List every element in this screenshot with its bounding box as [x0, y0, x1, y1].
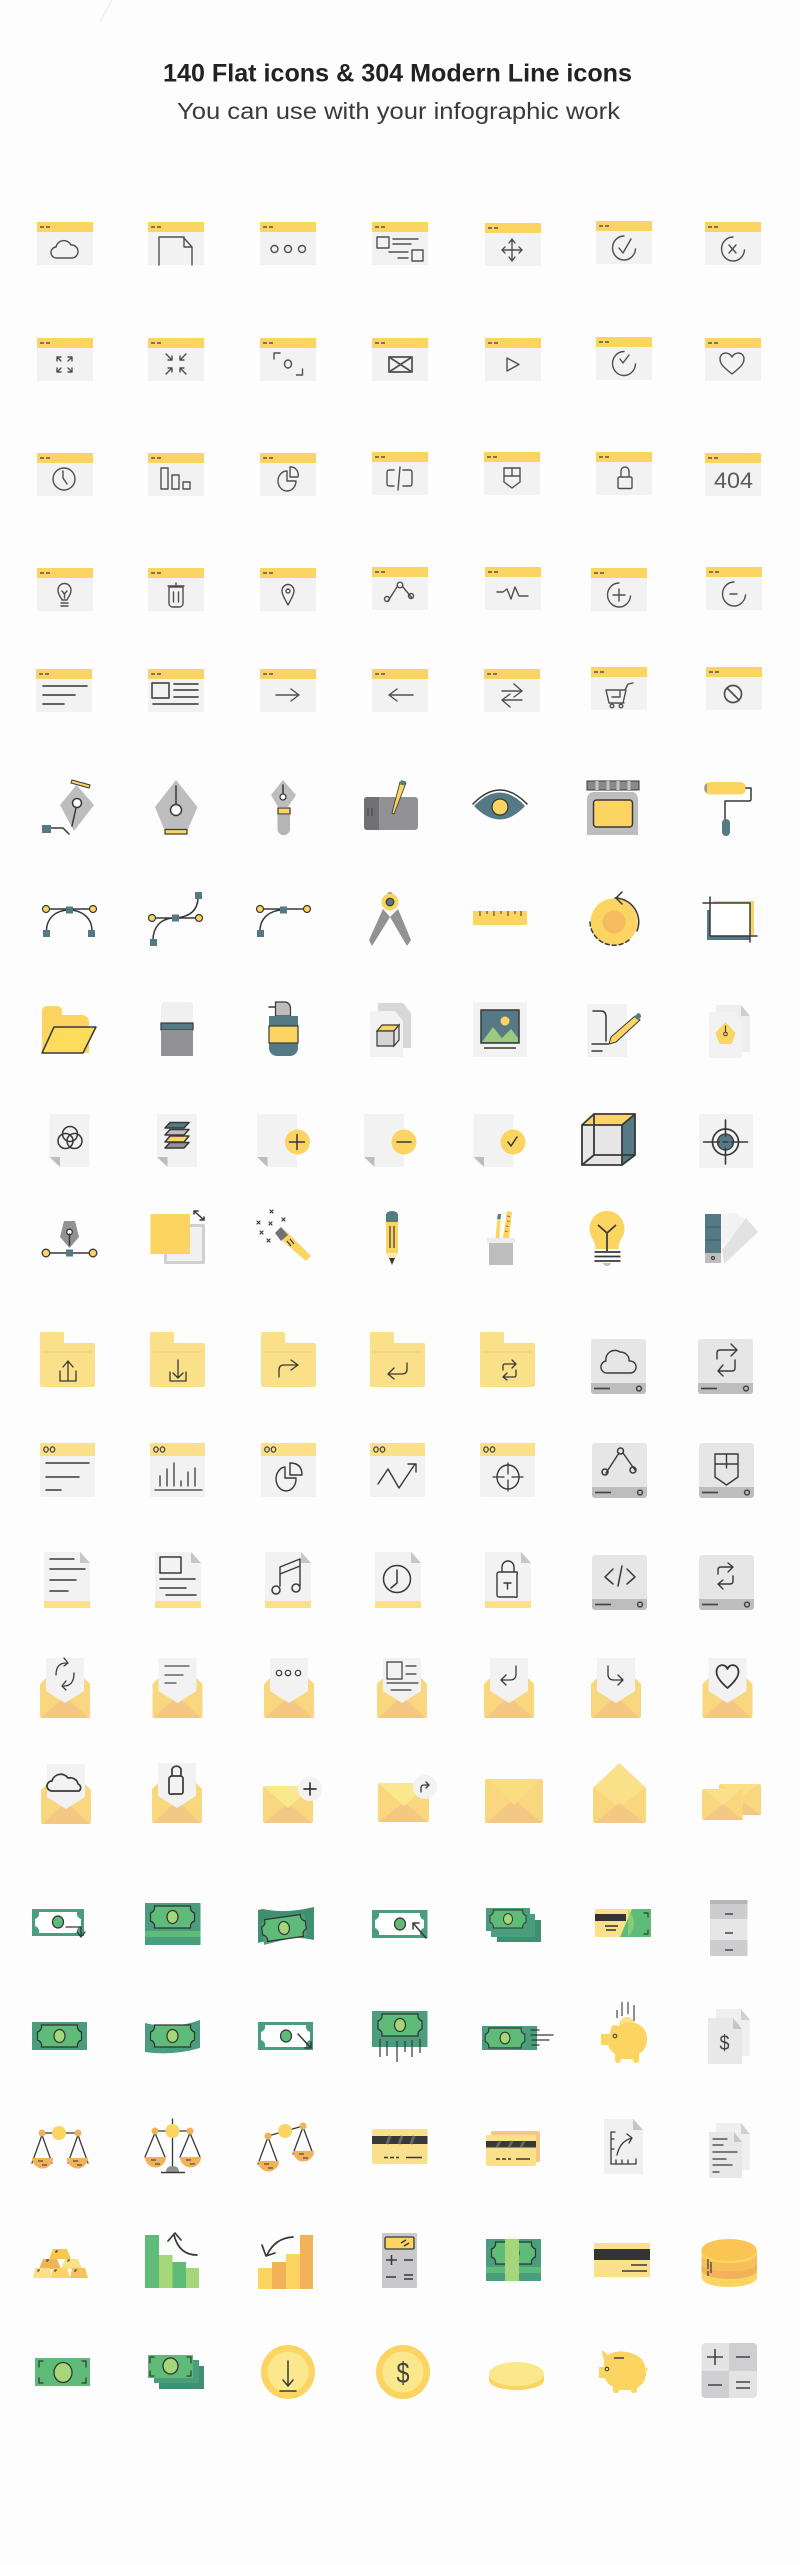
icon: cash bundle	[145, 1903, 200, 1945]
icon: document venn	[50, 1114, 90, 1167]
icon: file music	[265, 1552, 311, 1608]
icon: envelope dots	[264, 1658, 314, 1718]
icon: piggy bank	[599, 2350, 648, 2393]
icon: window code	[372, 452, 428, 495]
icon: target	[699, 1114, 753, 1168]
icon: window cart	[591, 667, 647, 710]
icon: picture	[473, 1002, 527, 1057]
icon: colour swatches	[705, 1213, 758, 1264]
icon: envelope article	[377, 1658, 427, 1718]
icon: dollar documents	[708, 2009, 750, 2064]
icon: card back	[594, 2243, 650, 2277]
icon: envelope add	[263, 1777, 322, 1823]
icon: window cancel	[705, 222, 761, 265]
icon: envelope reply	[484, 1658, 534, 1718]
icon: magic wand	[257, 1210, 311, 1261]
icon: drive cloud	[591, 1339, 646, 1394]
icon: coin stack	[702, 2239, 757, 2287]
icon: window check	[596, 221, 652, 264]
icon: document layers	[157, 1114, 197, 1167]
icon: document chart	[604, 2119, 643, 2174]
icon: window play	[485, 338, 541, 381]
icon: eraser	[161, 1002, 193, 1056]
icon: envelope heart	[702, 1658, 752, 1718]
icon: bezier curve 1	[42, 906, 96, 937]
icon: window pin	[260, 568, 316, 611]
icon: envelope cloud	[41, 1764, 91, 1824]
icon: documents with text	[709, 2123, 750, 2178]
icon: compass	[369, 892, 411, 946]
icon: window arrow right	[260, 669, 316, 712]
icon: window focus	[260, 338, 316, 381]
icon: bezier curve 3	[256, 906, 310, 937]
icon: wavy banknote	[145, 2020, 200, 2053]
icon: window trash	[148, 568, 204, 611]
icon: folder forward	[261, 1332, 316, 1387]
icon: window dots	[260, 222, 316, 265]
icon: credit card	[372, 2129, 428, 2164]
icon: crop	[703, 897, 757, 942]
icon: window 404: 404	[714, 468, 753, 493]
icon: window download circle	[596, 337, 652, 380]
icon: ruler	[473, 911, 527, 925]
icon: eye	[473, 790, 527, 820]
icon: pen holder	[487, 1211, 515, 1265]
icon: note stack	[148, 2355, 204, 2389]
icon: drive sync	[698, 1339, 753, 1394]
icon: envelope open	[593, 1763, 646, 1823]
icon: rotate circle	[590, 892, 639, 946]
icon: window pie chart	[261, 1443, 316, 1497]
icon: jar	[587, 781, 639, 835]
icon: window article	[148, 669, 204, 712]
subtitle: You can use with your infographic work	[177, 98, 621, 124]
icon: envelope text	[152, 1658, 202, 1718]
icon: document add	[257, 1114, 310, 1167]
section: folder, drive and file line icons	[40, 1332, 754, 1610]
icon: window lines	[40, 1443, 95, 1497]
icon: banded cash	[486, 2239, 541, 2281]
icon: window move	[485, 223, 541, 266]
icon: drive shield	[699, 1443, 754, 1498]
icon: paint roller	[704, 782, 751, 836]
icon: gold bars	[33, 2249, 88, 2278]
icon: coin dollar: $	[396, 2357, 410, 2390]
decorative stroke top left	[100, 0, 112, 22]
section: window line icons	[36, 221, 762, 712]
icon: pencil	[386, 1211, 398, 1265]
icon: filing cabinet	[710, 1900, 748, 1956]
icon: calculator	[382, 2233, 417, 2288]
icon: drive sync 2	[699, 1555, 754, 1610]
icon: graphics tablet	[364, 780, 418, 830]
icon: window pulse	[485, 567, 541, 610]
icon: window cloud	[37, 222, 93, 265]
icon: resize sheet	[150, 1211, 204, 1262]
icon: open folder	[42, 1006, 96, 1053]
icon: window forbidden	[706, 667, 762, 710]
icon: window shield	[484, 452, 540, 495]
icon: window arrow left	[372, 669, 428, 712]
icon: file text	[44, 1552, 90, 1608]
icon: window document	[148, 222, 204, 265]
icon: window bulb	[37, 568, 93, 611]
icon: window bars	[148, 453, 204, 496]
icon: window bar chart	[150, 1443, 205, 1497]
icon: pen nib	[155, 780, 198, 834]
icon: two credit cards	[486, 2131, 540, 2166]
icon: window lock	[596, 452, 652, 495]
icon: shredded note	[372, 2011, 428, 2062]
icon: piggy bank with coin	[601, 2002, 647, 2063]
icon: pen with handles	[42, 1221, 97, 1257]
icon: window minus circle	[706, 567, 762, 610]
icon: brush	[271, 780, 296, 835]
icon: folder upload	[40, 1332, 95, 1387]
icon: document remove	[364, 1114, 416, 1167]
icon: light bulb	[590, 1211, 624, 1266]
icon: window crosshair	[480, 1443, 535, 1497]
icon: document nib	[709, 1005, 750, 1058]
icon: scale with stand	[145, 2119, 201, 2172]
icon: calculator keypad	[702, 2343, 757, 2398]
icon: window growth	[370, 1443, 425, 1497]
icon: envelope stack	[702, 1784, 761, 1820]
icon: document pen	[587, 1004, 641, 1057]
icon: fast cash	[482, 2026, 553, 2050]
icon: pen tool tilted	[42, 780, 94, 834]
icon: window text lines	[36, 669, 92, 712]
icon: cash stack	[486, 1908, 541, 1942]
icon: white note down arrow	[258, 2022, 313, 2050]
icon: orange bars arrow	[258, 2235, 313, 2289]
icon: document approve	[474, 1114, 526, 1167]
icon: folder reply	[370, 1332, 425, 1387]
icon: drive code	[592, 1555, 647, 1610]
icon: envelope redo	[378, 1775, 437, 1822]
icon: green bars arrow	[145, 2233, 199, 2288]
icon: tilted scale	[258, 2122, 314, 2172]
icon: envelope lock	[152, 1763, 202, 1823]
icon: note with corners	[35, 2358, 90, 2386]
section: finance icons	[32, 1900, 757, 2399]
icon: document cube	[370, 1003, 411, 1057]
icon: cash with up arrow	[372, 1910, 428, 1938]
icon: banknote	[32, 2022, 87, 2050]
icon: glue bottle	[269, 1002, 298, 1056]
icon: window collapse	[148, 338, 204, 381]
icon: coin download	[261, 2345, 315, 2399]
icon: window swap	[484, 669, 540, 712]
icon: balance scale	[32, 2126, 88, 2168]
section: envelope icons	[40, 1658, 761, 1824]
icon: envelope forward	[591, 1658, 641, 1718]
icon: coin dollar	[376, 2345, 430, 2399]
icon: window mail	[372, 338, 428, 381]
icon: 3d cube	[582, 1114, 635, 1165]
icon: drive nodes	[592, 1443, 647, 1498]
icon: window heart	[705, 338, 761, 381]
icon: window clock	[37, 453, 93, 496]
icon: window 404	[705, 453, 761, 496]
icon: file lock	[485, 1552, 531, 1608]
icon: envelope sync	[40, 1658, 90, 1718]
icon: wavy cash tilted	[258, 1907, 314, 1945]
icon: flat coin	[489, 2362, 544, 2390]
icon: window path nodes	[372, 567, 428, 610]
icon: dollar documents: $	[720, 2032, 730, 2055]
icon: envelope closed	[485, 1779, 543, 1823]
icon: folder sync	[480, 1332, 535, 1387]
icon: cash with down arrow	[32, 1909, 85, 1937]
icon: window pie	[260, 453, 316, 496]
icon: file clock	[375, 1552, 421, 1608]
title: 140 Flat icons & 304 Modern Line icons	[163, 60, 632, 88]
icon: window layout	[372, 222, 428, 265]
section: design icons	[42, 780, 758, 1266]
icon: window expand	[37, 338, 93, 381]
icon: folder download	[150, 1332, 205, 1387]
icon: file article	[155, 1552, 201, 1608]
icon: card and cash	[595, 1909, 651, 1937]
icon: bezier curve 2	[148, 892, 202, 946]
icon: window plus circle	[591, 568, 647, 611]
